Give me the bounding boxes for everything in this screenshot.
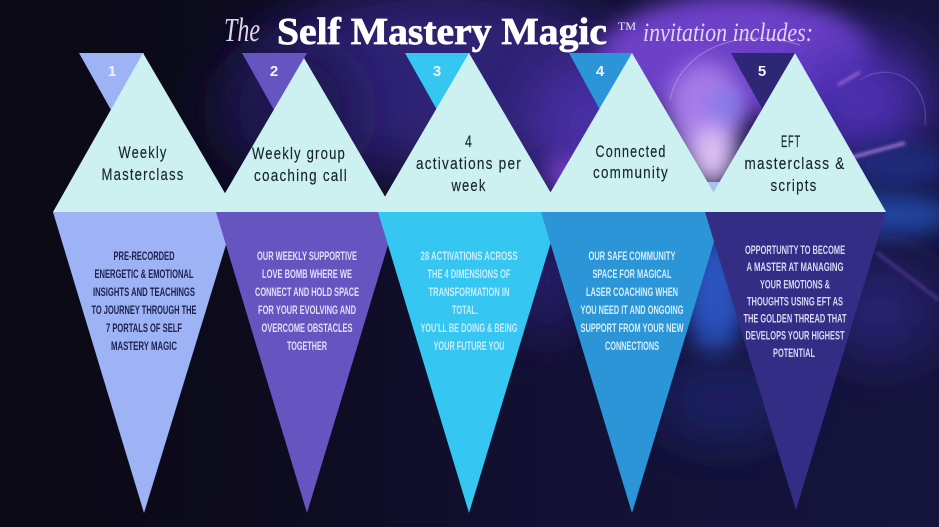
body text 5: THE GOLDEN THREAD THAT — [744, 314, 846, 326]
body text 4: CONNECTIONS — [605, 341, 659, 353]
lower triangle 3 — [378, 212, 560, 513]
body text 4: OUR SAFE COMMUNITY — [588, 251, 676, 263]
body text 5: THOUGHTS USING EFT AS — [747, 296, 843, 308]
body text 2: FOR YOUR EVOLVING AND — [258, 305, 356, 317]
body text 1: 7 PORTALS OF SELF — [106, 323, 182, 335]
body text 4: LASER COACHING WHEN — [586, 287, 678, 299]
body text 2: LOVE BOMB WHERE WE — [262, 269, 352, 281]
heading 4 — [593, 143, 669, 182]
heading 2: Weekly group — [252, 145, 346, 163]
number badge 3 — [405, 53, 470, 110]
upper triangle 2 — [214, 58, 394, 212]
body text 1: ENERGETIC & EMOTIONAL — [94, 269, 194, 281]
body text 1: TO JOURNEY THROUGH THE — [92, 305, 197, 317]
body text 1 — [92, 251, 197, 353]
heading 3 — [416, 133, 522, 195]
heading 3: 4 — [465, 133, 473, 151]
body text 4: SPACE FOR MAGICAL — [592, 269, 672, 281]
title main: Self Mastery Magic: Self Mastery Magic — [277, 11, 607, 53]
body text 2 — [255, 251, 359, 353]
panel 4: Connected community — [539, 53, 725, 513]
small notch triangle — [706, 182, 721, 193]
body text 5: OPPORTUNITY TO BECOME — [745, 245, 845, 257]
panel 2: Weekly group coaching call — [214, 53, 398, 513]
heading 1: Weekly — [118, 144, 168, 162]
number badge 4: 4 — [596, 63, 605, 80]
lower triangle 4 — [541, 212, 723, 513]
body text 1: MASTERY MAGIC — [111, 341, 177, 353]
lower triangle 2 — [216, 212, 398, 513]
body text 5: YOUR EMOTIONS & — [760, 280, 830, 292]
body text 2: OUR WEEKLY SUPPORTIVE — [257, 251, 357, 263]
heading 3: activations per — [416, 155, 522, 173]
heading 4: Connected — [596, 143, 666, 161]
heading 2: coaching call — [254, 167, 348, 185]
body text 3: YOUR FUTURE YOU — [434, 341, 504, 353]
heading 5 — [744, 133, 846, 195]
body text 5: A MASTER AT MANAGING — [746, 262, 844, 274]
heading 5: EFT — [781, 133, 801, 151]
number badge 4 — [569, 53, 633, 110]
body text 3: TOTAL. — [452, 305, 478, 317]
heading 2 — [252, 145, 348, 185]
panel 5: EFT masterclass and scripts — [702, 53, 886, 510]
body text 2: CONNECT AND HOLD SPACE — [255, 287, 359, 299]
body text 2: OVERCOME OBSTACLES — [262, 323, 353, 335]
upper triangle 4 — [539, 53, 725, 212]
panel 3: 4 activations per week — [376, 53, 562, 513]
number badge 3: 3 — [433, 63, 441, 80]
body text 3 — [420, 251, 518, 353]
trademark: TM — [618, 19, 636, 33]
upper triangle 1 — [53, 53, 236, 212]
heading 4: community — [593, 164, 669, 182]
body text 5 — [744, 245, 846, 360]
lower triangle 5 — [705, 212, 886, 510]
number badge 2: 2 — [270, 63, 278, 80]
title script: invitation includes: invitation includes: — [643, 18, 813, 47]
body text 3: TRANSFORMATION IN — [428, 287, 510, 299]
body text 3: 28 ACTIVATIONS ACROSS — [420, 251, 518, 263]
number badge 1 — [79, 53, 144, 110]
body text 2: TOGETHER — [287, 341, 327, 353]
body text 3: YOU'LL BE DOING & BEING — [420, 323, 518, 335]
body text 1: INSIGHTS AND TEACHINGS — [93, 287, 195, 299]
number badge 5: 5 — [758, 63, 766, 80]
panel 1: Weekly Masterclass — [53, 53, 236, 513]
body text 4: YOU NEED IT AND ONGOING — [580, 305, 684, 317]
body text 3: THE 4 DIMENSIONS OF — [428, 269, 510, 281]
lower triangle 1 — [53, 212, 236, 513]
body text 4: SUPPORT FROM YOUR NEW — [580, 323, 684, 335]
upper triangle 3 — [376, 53, 562, 212]
title — [224, 11, 813, 53]
heading 3: week — [451, 177, 486, 195]
heading 5: masterclass & — [744, 155, 846, 173]
heading 1 — [102, 144, 184, 184]
heading 5: scripts — [770, 177, 818, 195]
heading 1: Masterclass — [102, 166, 184, 184]
number badge 5 — [731, 53, 796, 110]
title script: The: The — [224, 12, 260, 49]
body text 1: PRE-RECORDED — [114, 251, 174, 263]
number badge 1: 1 — [108, 63, 116, 80]
body text 4 — [580, 251, 684, 353]
number badge 2 — [242, 53, 307, 110]
upper triangle 5 — [702, 53, 886, 212]
body text 5: DEVELOPS YOUR HIGHEST — [746, 330, 844, 342]
body text 5: POTENTIAL — [773, 348, 815, 360]
